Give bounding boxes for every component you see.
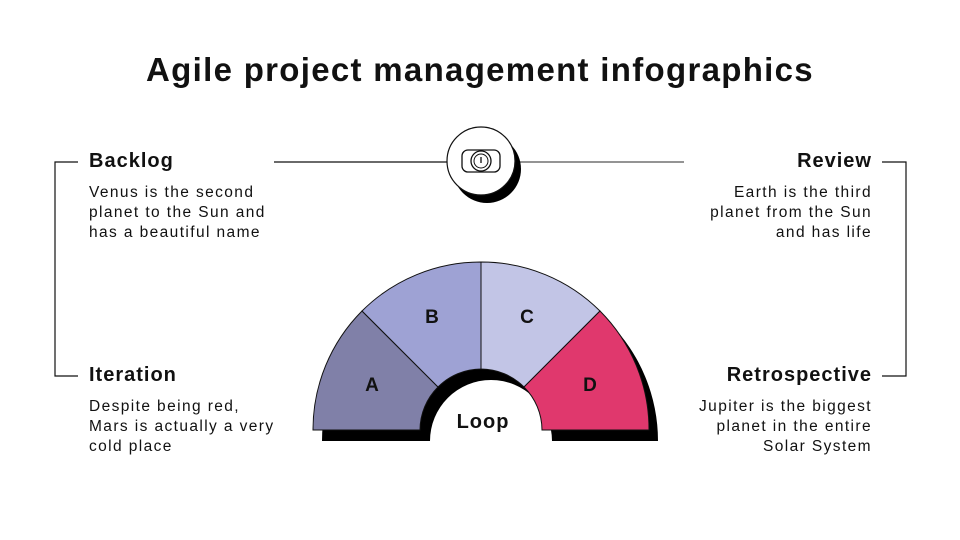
semicircle chart: B [425, 307, 439, 328]
text: Iteration: Mars is actually a very [89, 418, 275, 435]
text: Retrospective [699, 398, 872, 455]
semicircle chart: C [520, 307, 534, 328]
text: Review: Earth is the third [734, 184, 872, 201]
heading: Backlog: Backlog [89, 150, 174, 172]
text: Retrospective: Jupiter is the biggest [699, 398, 872, 415]
semicircle chart: A [365, 375, 379, 396]
heading: Retrospective: Retrospective [727, 364, 872, 386]
heading: Review: Review [797, 150, 872, 172]
text: Backlog: Venus is the second [89, 184, 254, 201]
semicircle chart [313, 262, 658, 441]
text: Retrospective: Solar System [763, 438, 872, 455]
text: Iteration: cold place [89, 438, 173, 455]
icon: gauge [447, 127, 521, 203]
text: Review: and has life [776, 224, 872, 241]
text: Iteration: Despite being red, [89, 398, 240, 415]
text: Retrospective: planet in the entire [716, 418, 872, 435]
text: Iteration [89, 398, 275, 455]
title: Agile project management infographics [146, 51, 814, 88]
heading: Iteration: Iteration [89, 364, 177, 386]
semicircle chart: Loop [457, 411, 509, 433]
text: Backlog [89, 184, 266, 241]
text: Review [710, 184, 872, 241]
text: Backlog: has a beautiful name [89, 224, 261, 241]
text: Backlog: planet to the Sun and [89, 204, 266, 221]
semicircle chart: D [583, 375, 597, 396]
text: Review: planet from the Sun [710, 204, 872, 221]
